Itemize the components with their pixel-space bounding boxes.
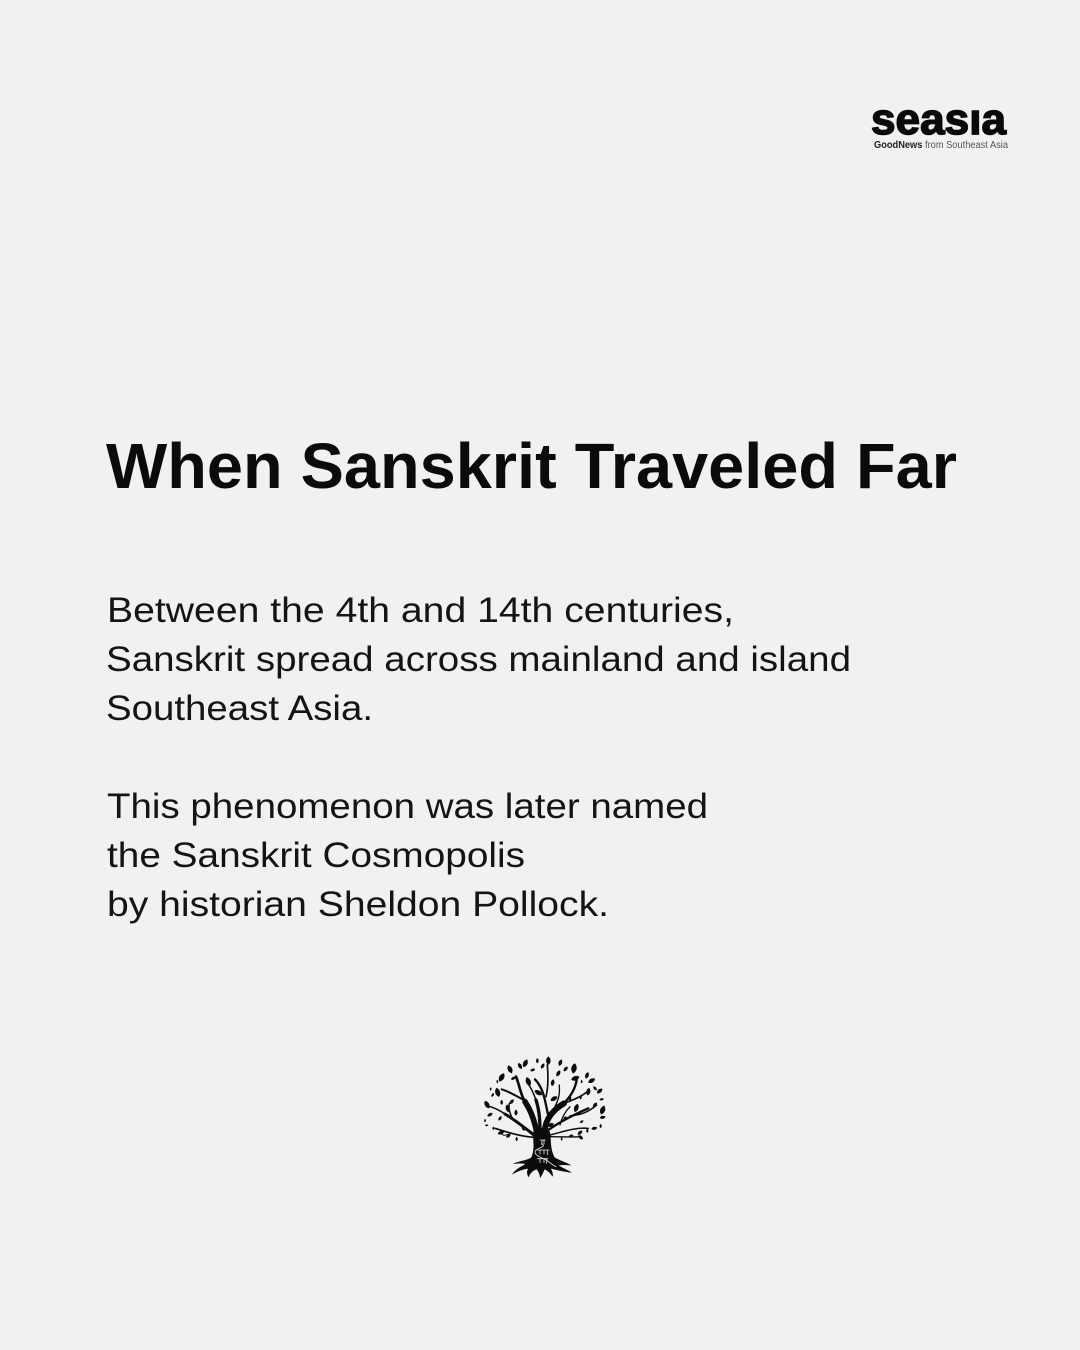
text block: Sanskrit spread: Southeast Asia. (106, 689, 373, 728)
icon: tree (483, 1056, 607, 1178)
text block: Sanskrit spread (106, 591, 851, 728)
text block: Sanskrit Cosmopolis (107, 787, 708, 924)
logo tagline: GoodNews from Southeast Asia (874, 140, 1008, 151)
logo: seasia: seasia (871, 95, 1007, 144)
tree trunk and roots (512, 1127, 572, 1178)
tree leaves (483, 1056, 607, 1141)
text block: Sanskrit spread: Between the 4th and 14th centuries, (107, 591, 734, 630)
text block: Sanskrit Cosmopolis: by historian Sheldon Pollock. (107, 885, 609, 924)
tree branches (490, 1065, 597, 1137)
text block: Sanskrit Cosmopolis: This phenomenon was later named (107, 787, 708, 826)
text block: Sanskrit Cosmopolis: the Sanskrit Cosmopolis (107, 836, 525, 875)
trunk inscription (535, 1140, 556, 1167)
title: When Sanskrit Traveled Far (106, 430, 957, 502)
text block: Sanskrit spread: Sanskrit spread across mainland and island (106, 640, 851, 679)
